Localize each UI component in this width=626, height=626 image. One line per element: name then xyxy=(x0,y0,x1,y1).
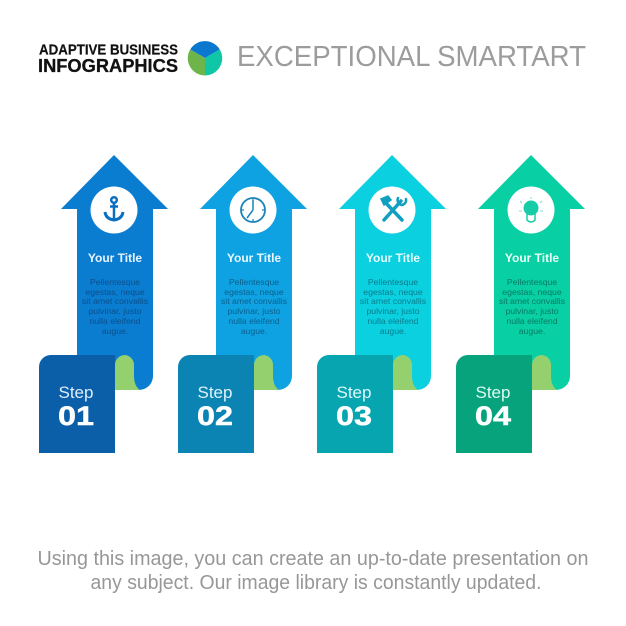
body text 3: augue. xyxy=(380,326,406,336)
step number 4: 04 xyxy=(475,401,511,431)
step box 4 xyxy=(456,355,532,453)
panel: step 3 xyxy=(317,155,446,453)
icon circle 4 xyxy=(508,186,554,234)
body text 2 xyxy=(221,277,288,336)
icon: tri-colour circle logo xyxy=(188,41,222,76)
header brand text xyxy=(38,42,178,76)
header brand text: ADAPTIVE BUSINESS xyxy=(39,42,178,58)
step number 2: 02 xyxy=(197,401,233,431)
footer text: Using this image, you can create an up-to-date presentation on xyxy=(38,548,588,570)
body text 3: Pellentesque xyxy=(368,277,418,287)
green fold 1 xyxy=(115,355,140,390)
body text 1: Pellentesque xyxy=(90,277,140,287)
body text 4: augue. xyxy=(519,326,545,336)
body text 4: Pellentesque xyxy=(507,277,557,287)
step box 1 xyxy=(39,355,115,453)
icon: clock xyxy=(241,198,265,222)
body text 1: egestas, neque xyxy=(85,287,145,297)
body text 4: nulla eleifend xyxy=(506,316,558,326)
body text 3 xyxy=(360,277,427,336)
step box 3 xyxy=(317,355,393,453)
body text 4: pulvinar, justo xyxy=(505,306,559,316)
body text 2: pulvinar, justo xyxy=(227,306,281,316)
heading 4: Your Title xyxy=(505,251,559,265)
step number 3: 03 xyxy=(336,401,372,431)
heading 2: Your Title xyxy=(227,251,281,265)
body text 3: pulvinar, justo xyxy=(366,306,420,316)
body text 2: sit amet convallis xyxy=(221,296,288,306)
arrow 3 xyxy=(339,155,446,390)
step label 1: Step xyxy=(59,383,93,402)
body text 3: egestas, neque xyxy=(363,287,423,297)
arrow 1 xyxy=(61,155,168,390)
icon circle 3 xyxy=(368,186,416,234)
green fold 3 xyxy=(393,355,418,390)
body text 2: augue. xyxy=(241,326,267,336)
panel: step 2 xyxy=(178,155,307,453)
icon: light bulb xyxy=(519,197,543,222)
icon: anchor xyxy=(105,197,123,220)
heading 3: Your Title xyxy=(366,251,420,265)
body text 1: nulla eleifend xyxy=(89,316,141,326)
body text 2: nulla eleifend xyxy=(228,316,280,326)
body text 1: sit amet convallis xyxy=(82,296,149,306)
green fold 4 xyxy=(532,355,557,390)
heading 1: Your Title xyxy=(88,251,142,265)
body text 1: pulvinar, justo xyxy=(88,306,142,316)
body text 4: sit amet convallis xyxy=(499,296,566,306)
step number 1: 01 xyxy=(58,401,94,431)
step label 3: Step xyxy=(337,383,371,402)
body text 4: egestas, neque xyxy=(502,287,562,297)
body text 4 xyxy=(499,277,566,336)
panel: step 1 xyxy=(39,155,168,453)
green fold 2 xyxy=(254,355,279,390)
step box 2 xyxy=(178,355,254,453)
footer text xyxy=(38,548,588,594)
arrow 4 xyxy=(478,155,585,390)
step label 4: Step xyxy=(476,383,510,402)
body text 1: augue. xyxy=(102,326,128,336)
footer text: any subject. Our image library is constantly updated. xyxy=(90,572,542,594)
arrow 2 xyxy=(200,155,307,390)
title: EXCEPTIONAL SMARTART xyxy=(237,41,586,73)
body text 2: Pellentesque xyxy=(229,277,279,287)
body text 2: egestas, neque xyxy=(224,287,284,297)
icon circle 1 xyxy=(90,186,138,234)
body text 3: nulla eleifend xyxy=(367,316,419,326)
icon circle 2 xyxy=(230,186,276,234)
body text 1 xyxy=(82,277,149,336)
icon: crossed tools xyxy=(381,196,406,220)
header brand text: INFOGRAPHICS xyxy=(38,55,178,76)
body text 3: sit amet convallis xyxy=(360,296,427,306)
step label 2: Step xyxy=(198,383,232,402)
panel: step 4 xyxy=(456,155,585,453)
